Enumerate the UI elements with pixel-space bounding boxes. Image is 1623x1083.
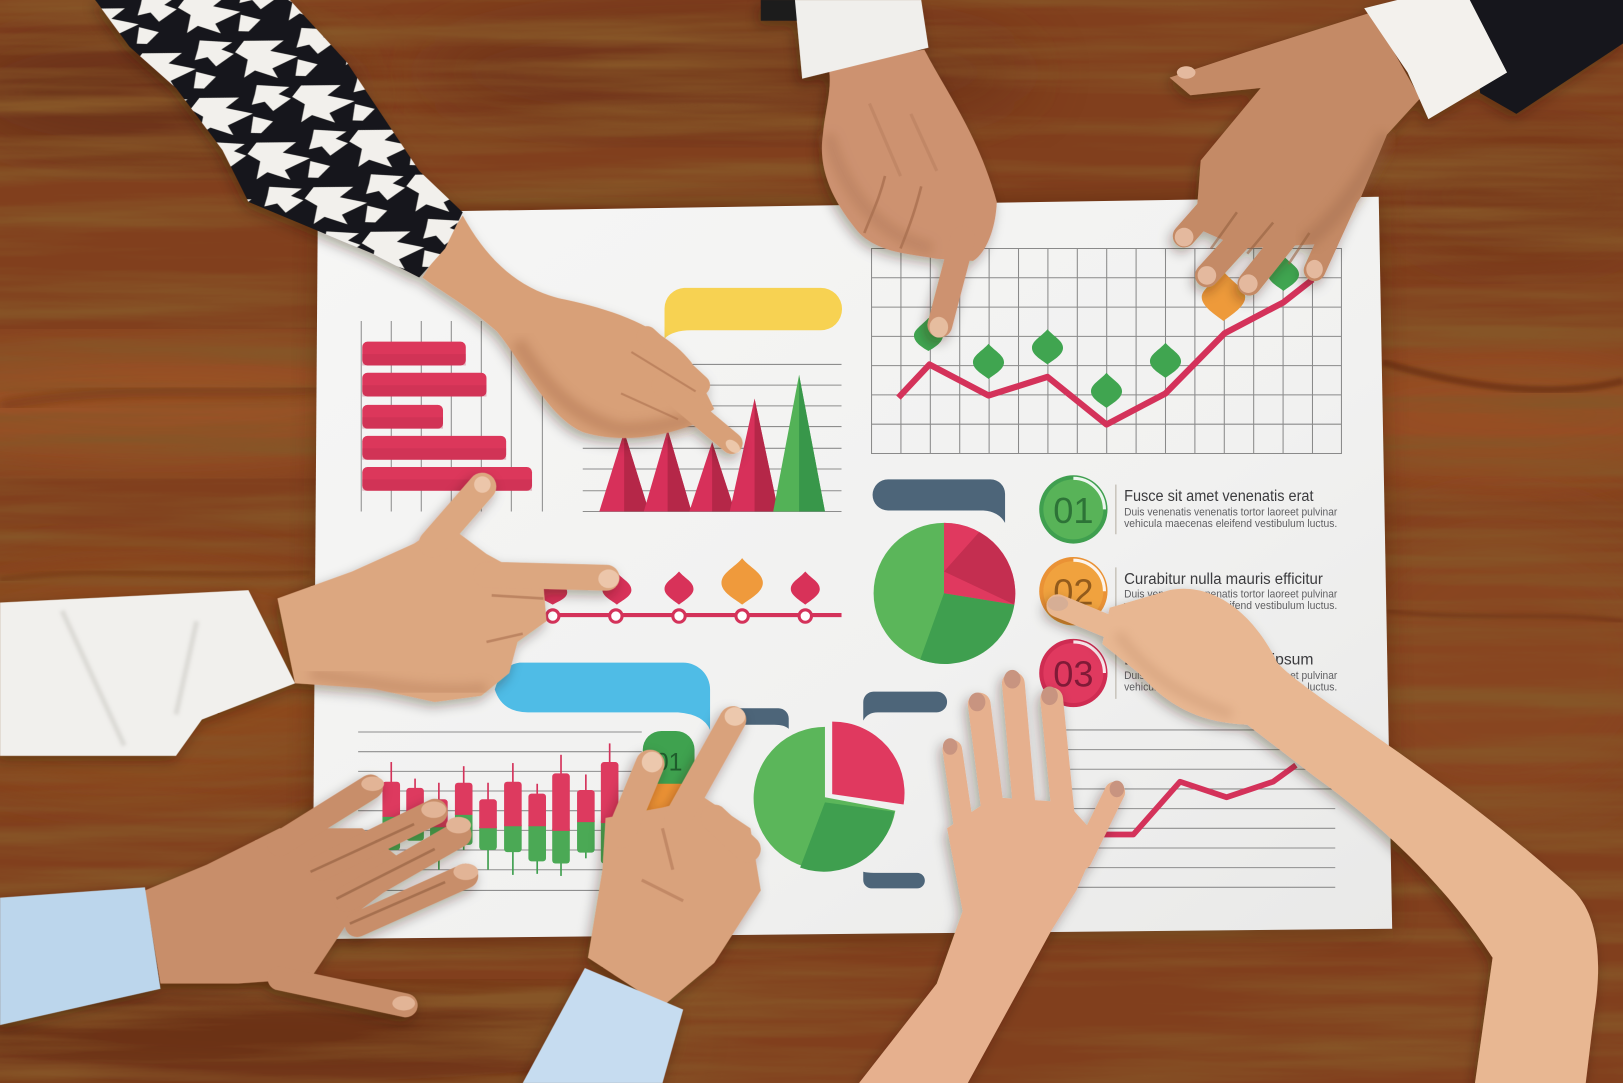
small legend pill green and orange <box>643 731 696 828</box>
pie chart 1 <box>874 523 1015 664</box>
candlestick chart <box>358 732 642 890</box>
item 03: vehicula maecenas eleifend vestibulum luctus. <box>1124 682 1337 694</box>
item 01: Duis venenatis venenatis tortor laoreet pulvinar <box>1124 507 1338 519</box>
slate callouts right of lower pie <box>863 692 947 888</box>
item 02: 02 <box>1053 572 1094 613</box>
slate callout small near lower pie <box>730 708 789 729</box>
pie chart 2 exploded <box>754 722 905 872</box>
hand: bottom center with blue cuff <box>523 707 761 1083</box>
hand: top right with dark sleeve <box>1170 0 1623 293</box>
item 03 <box>1039 639 1338 707</box>
numbered list <box>1039 475 1338 707</box>
item 02: Duis venenatis venenatis tortor laoreet pulvinar <box>1124 588 1338 600</box>
triangle peak chart <box>583 364 842 511</box>
item 03: 03 <box>1053 653 1094 694</box>
item 01 <box>1039 475 1338 544</box>
item 02 <box>1039 557 1338 625</box>
hand: top left with patterned sleeve <box>95 0 743 456</box>
slate callout above pie <box>873 479 1005 523</box>
item 03: Duis venenatis venenatis tortor laoreet pulvinar <box>1124 670 1338 682</box>
item 01: Fusce sit amet venenatis erat <box>1124 488 1314 505</box>
yellow callout <box>665 288 842 339</box>
paper sheet <box>311 197 1393 942</box>
horizontal bar chart <box>361 321 542 511</box>
line chart with grid and diamonds <box>872 248 1341 453</box>
item 02: Curabitur nulla mauris efficitur <box>1124 571 1323 588</box>
blue callout <box>495 663 710 730</box>
hand and arm: right pointing <box>1047 589 1598 1083</box>
item 03: Lorem dolor sit amet ipsum <box>1124 652 1314 669</box>
item 01: 01 <box>1053 490 1094 531</box>
timeline with diamonds <box>538 558 842 622</box>
hand: left pointing with white sleeve <box>0 476 619 756</box>
item 02: vehicula maecenas eleifend vestibulum luctus. <box>1124 600 1337 612</box>
small legend pill green and orange: 01 <box>655 749 682 776</box>
lower right line chart <box>1066 730 1335 887</box>
hand: top center with white cuff <box>761 0 997 338</box>
item 01: vehicula maecenas eleifend vestibulum luctus. <box>1124 518 1337 530</box>
hand: bottom right spread fingers <box>859 670 1124 1083</box>
hand: bottom left with blue sleeve <box>0 777 478 1025</box>
